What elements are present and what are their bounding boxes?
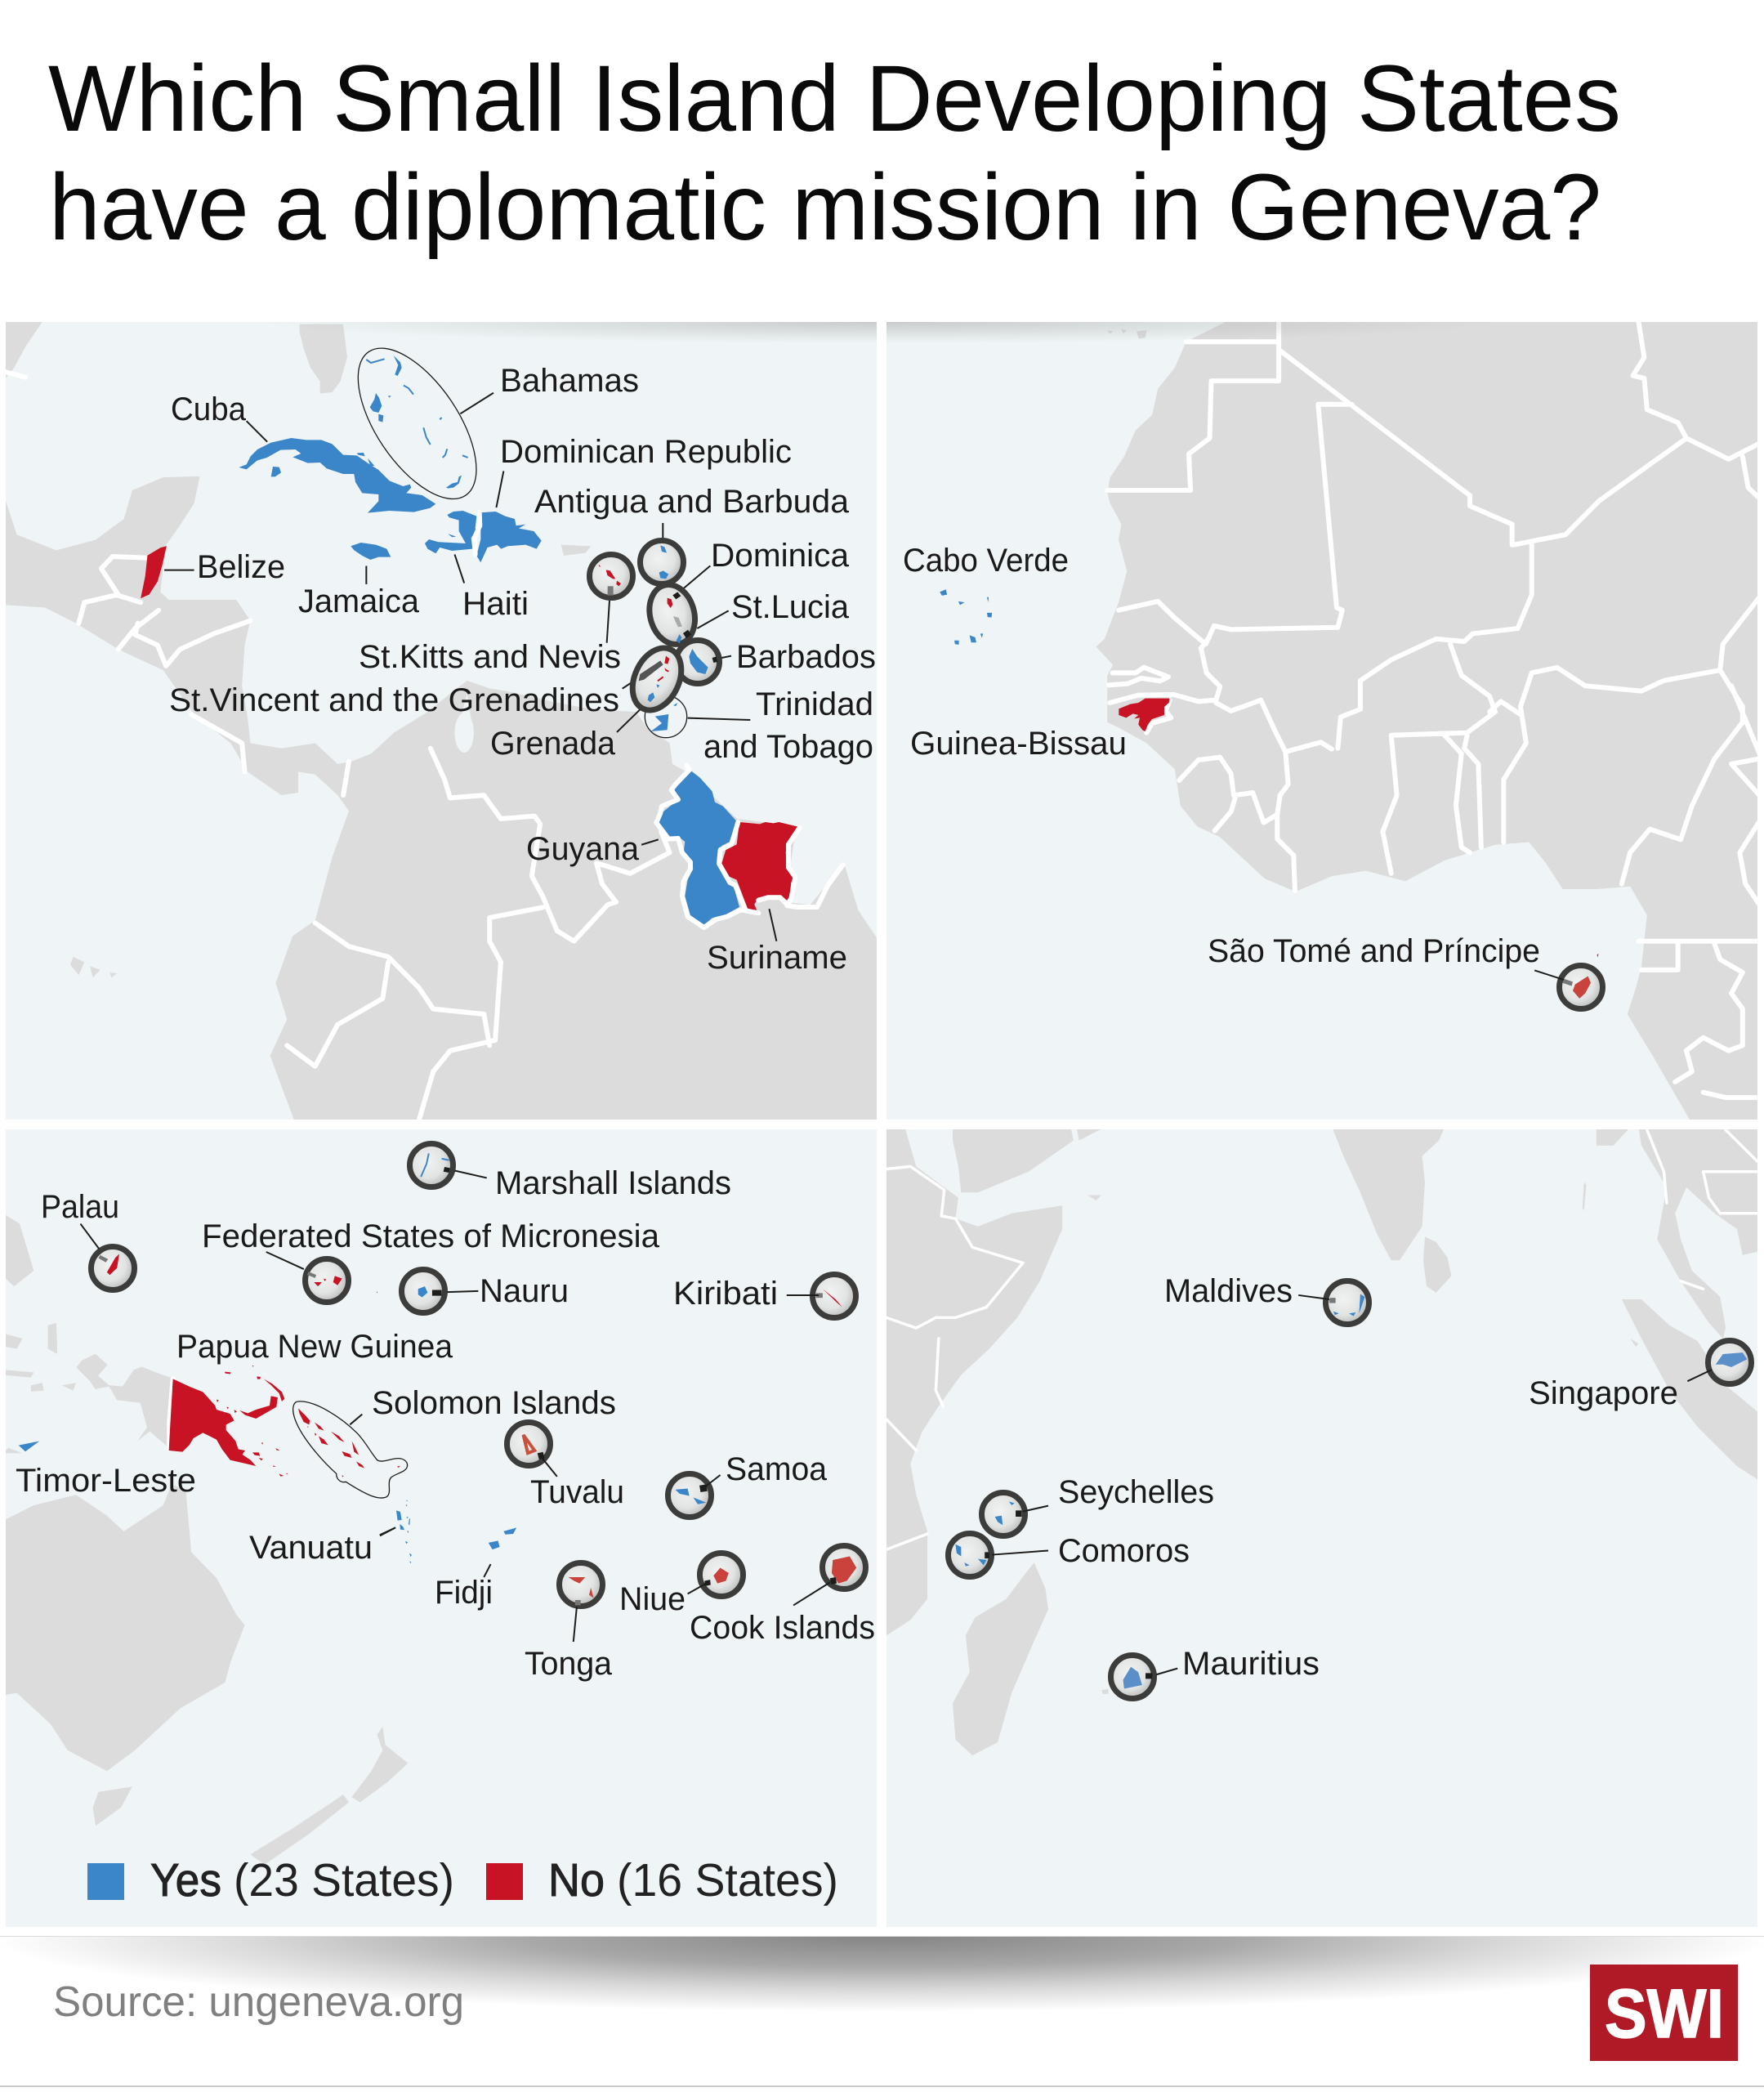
text: Caribbean country labels: Trinidad — [756, 686, 873, 722]
text: Pacific labels: Vanuatu — [249, 1530, 373, 1566]
text: Pacific labels: Cook Islands — [690, 1610, 875, 1646]
legend: (23 States) — [234, 1854, 454, 1906]
legend: (16 States) — [617, 1854, 838, 1906]
legend: No — [548, 1854, 605, 1906]
text: Indian Ocean labels: Comoros — [1058, 1533, 1190, 1569]
bottom rule — [0, 2085, 1764, 2087]
source note: Source: ungeneva.org — [53, 1978, 464, 2026]
text: Pacific labels: Papua New Guinea — [176, 1329, 453, 1365]
panel top shadow right — [886, 322, 1337, 339]
callouts: Pacific magnifiers — [80, 1144, 865, 1642]
text: Pacific labels: Samoa — [726, 1451, 828, 1487]
islands: Greater Antilles and Bahamas — [239, 329, 542, 562]
Florida — [300, 324, 347, 394]
panel: Indian Ocean map — [882, 1128, 1764, 1927]
title — [48, 47, 1621, 260]
text: West Africa labels: Cabo Verde — [903, 543, 1069, 579]
text: Pacific labels: Niue — [619, 1581, 686, 1617]
country: Fiji — [489, 1527, 516, 1549]
text: Pacific labels: Nauru — [480, 1273, 569, 1309]
text: Caribbean country labels: Guyana — [526, 831, 640, 867]
text: West Africa labels: São Tomé and Príncipe — [1208, 933, 1540, 969]
country: Belize — [141, 546, 167, 598]
text: Pacific labels: Tuvalu — [530, 1474, 624, 1510]
text: Caribbean country labels: Antigua and Barbuda — [534, 484, 850, 520]
text: Caribbean country labels: Bahamas — [500, 363, 639, 399]
islands: Cabo Verde — [940, 589, 992, 645]
text: Caribbean country labels: and Tobago — [703, 729, 873, 765]
callout: São Tomé and Príncipe magnifier — [1534, 966, 1603, 1008]
panel: Caribbean map — [6, 322, 882, 1124]
country: Timor-Leste — [19, 1442, 39, 1451]
São Tomé tiny Príncipe — [1597, 954, 1599, 958]
country: Guinea-Bissau — [1119, 699, 1170, 731]
logo: SWI: SWI — [1605, 1975, 1724, 2052]
footer shadow — [0, 1936, 1764, 2007]
text: Pacific labels: Fidji — [435, 1575, 493, 1611]
text: Pacific labels: Solomon Islands — [372, 1385, 616, 1421]
text: Pacific labels: Kiribati — [673, 1276, 778, 1312]
panel: Pacific map — [2, 1129, 877, 1927]
title: have a diplomatic mission in Geneva? — [49, 155, 1601, 260]
legend: Yes — [150, 1854, 221, 1906]
callouts: Eastern Caribbean magnifiers — [590, 523, 750, 738]
text: Caribbean country labels: Dominica — [711, 538, 850, 574]
text: Pacific labels: Marshall Islands — [495, 1165, 731, 1201]
text: Caribbean country labels: St.Vincent and the Grenadines — [169, 682, 619, 718]
text: Indian Ocean labels: Singapore — [1529, 1375, 1678, 1411]
labels: Caribbean leaders — [164, 393, 776, 941]
logo: SWI — [1590, 1965, 1738, 2061]
text: Caribbean country labels: Dominican Republic — [500, 434, 792, 470]
panel top shadow — [382, 322, 877, 339]
country: Papua New Guinea, Solomon Islands, Vanuatu — [76, 1354, 412, 1563]
text: Pacific labels: Tonga — [525, 1646, 613, 1682]
text: Indian Ocean labels — [1058, 1273, 1678, 1682]
text: Caribbean country labels: St.Kitts and Nevis — [359, 639, 621, 675]
text: Indian Ocean labels: Mauritius — [1182, 1646, 1320, 1682]
text: Caribbean country labels: Barbados — [736, 639, 876, 675]
text: Caribbean country labels: Grenada — [490, 726, 616, 762]
text: Pacific labels: Federated States of Micronesia — [202, 1218, 660, 1254]
panel: West Africa map — [886, 319, 1764, 1124]
text: Caribbean country labels — [169, 363, 876, 976]
text: Pacific labels: Palau — [41, 1189, 119, 1225]
text: West Africa labels: Guinea-Bissau — [910, 726, 1127, 762]
text: Indian Ocean labels: Seychelles — [1058, 1474, 1214, 1510]
title: Which Small Island Developing States — [48, 47, 1621, 151]
text: Caribbean country labels: Haiti — [462, 586, 529, 622]
leaders — [380, 1527, 491, 1577]
legend — [87, 1862, 835, 1906]
text: Indian Ocean labels: Maldives — [1164, 1273, 1293, 1309]
text: West Africa labels — [903, 543, 1540, 969]
countries: Guyana and Suriname — [656, 766, 843, 928]
callouts: Indian Ocean magnifiers — [948, 1281, 1752, 1698]
text: Caribbean country labels: Suriname — [707, 940, 847, 976]
text: Caribbean country labels: Belize — [197, 549, 285, 585]
text: Pacific labels — [16, 1165, 875, 1682]
Puerto Rico — [561, 545, 591, 556]
text: Caribbean country labels: Jamaica — [298, 583, 420, 619]
text: Caribbean country labels: Cuba — [171, 391, 247, 427]
text: Caribbean country labels: St.Lucia — [731, 589, 850, 625]
text: Pacific labels: Timor-Leste — [16, 1463, 196, 1499]
